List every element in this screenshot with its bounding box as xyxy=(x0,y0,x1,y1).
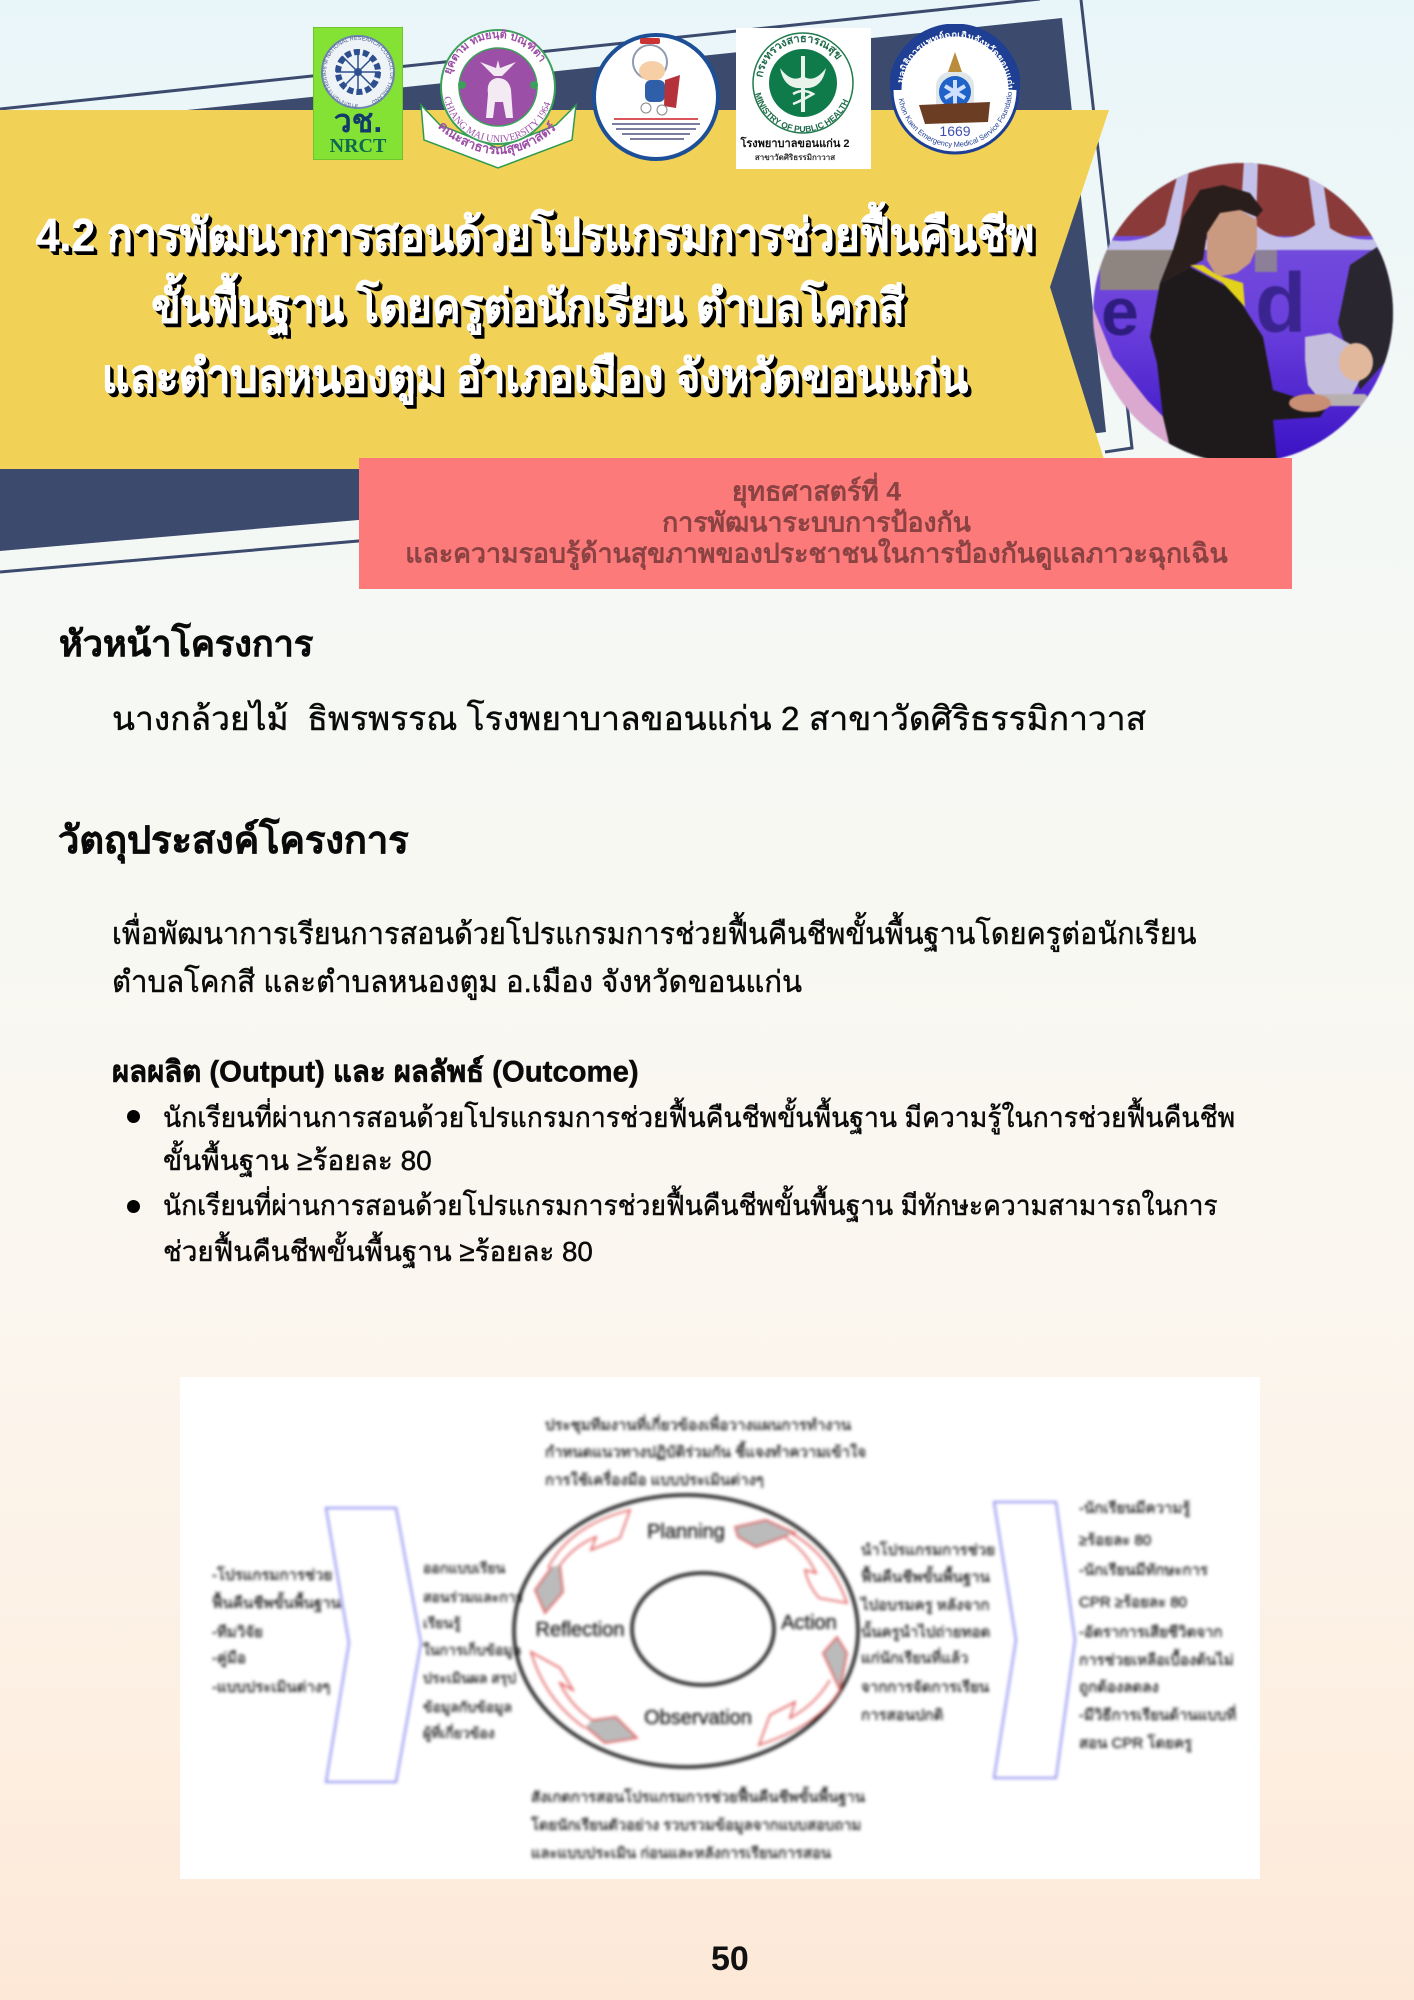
input note: -คู่มือ xyxy=(212,1650,246,1667)
heading: objectives: วัตถุประสงค์โครงการ xyxy=(58,820,409,862)
logo: NRCT: NRCT xyxy=(330,135,387,157)
logo: NRCT: วช. xyxy=(334,103,382,139)
input note: ฟื้นคืนชีพขั้นพื้นฐาน xyxy=(212,1592,341,1612)
action research cycle diagram xyxy=(210,1412,1238,1862)
objective line 1: เพื่อพัฒนาการเรียนการสอนด้วยโปรแกรมการช่วยฟื้นคืนชีพขั้นพื้นฐานโดยครูต่อนักเรียน xyxy=(112,918,1197,951)
logo: Emergency Medical Service Foundation xyxy=(890,24,1020,154)
title line 2: ขั้นพื้นฐาน โดยครูต่อนักเรียน ตำบลโคกสี xyxy=(151,280,905,332)
logo: Chiang Mai University: CHIANG MAI UNIVERSITY 1964 xyxy=(444,96,550,142)
input chevron xyxy=(326,1508,421,1782)
reflection note: ผู้ที่เกี่ยวข้อง xyxy=(423,1724,495,1742)
title line 3: และตำบลหนองตูม อำเภอเมือง จังหวัดขอนแก่น xyxy=(102,350,968,402)
page number: 50 xyxy=(711,1940,749,1978)
strategy heading: ยุทธศาสตร์ที่ 4 xyxy=(732,477,901,507)
input note: -โปรแกรมการช่วย xyxy=(212,1566,332,1584)
output note: การช่วยเหลือเบื้องต้นไม่ xyxy=(1079,1649,1234,1669)
man on right xyxy=(1338,247,1396,390)
hair xyxy=(1160,185,1263,283)
action note: แก่นักเรียนที่แล้ว xyxy=(861,1647,968,1667)
output and outcome heading: ผลผลิต (Output) และ ผลลัพธ์ (Outcome) xyxy=(112,1055,639,1088)
output note: สอน CPR โดยครู xyxy=(1079,1734,1192,1752)
output note: CPR ≥ร้อยละ 80 xyxy=(1079,1594,1187,1611)
top note: การใช้เครื่องมือ แบบประเมินต่างๆ xyxy=(545,1469,764,1489)
outer ring xyxy=(514,1495,858,1767)
logo: mascot xyxy=(592,33,720,161)
reflection note: สอนร่วมและการ xyxy=(423,1589,524,1605)
logo: Chiang Mai University xyxy=(420,29,577,169)
bullet 2 line 2: ช่วยฟื้นคืนชีพขั้นพื้นฐาน ≥ร้อยละ 80 xyxy=(163,1236,593,1267)
reflection note: ในการเก็บข้อมูล xyxy=(423,1641,521,1659)
strategy line 3: และความรอบรู้ด้านสุขภาพของประชาชนในการป้องกันดูแลภาวะฉุกเฉิน xyxy=(405,539,1228,569)
face xyxy=(1207,210,1257,277)
reflection note: เรียนรู้ xyxy=(423,1615,461,1632)
logo: NRCT xyxy=(313,27,403,160)
reflection note: ออกแบบเรียน xyxy=(423,1560,506,1576)
cycle labels: Reflection xyxy=(536,1619,624,1641)
trophy xyxy=(1305,333,1360,400)
output note: ถูกต้องลดลง xyxy=(1079,1679,1159,1696)
thin frame line xyxy=(0,0,1040,109)
project lead name: นางกล้วยไม้ ธิพรพรรณ โรงพยาบาลขอนแก่น 2 สาขาวัดศิริธรรมิกาวาส xyxy=(112,701,1146,738)
logo: Chiang Mai University: ยุคตาม ทมยนฺติ ปณฺฑิตา xyxy=(444,29,545,74)
bullet 1 line 2: ขั้นพื้นฐาน ≥ร้อยละ 80 xyxy=(163,1145,432,1176)
action note: ไปอบรมครู หลังจาก xyxy=(860,1596,990,1614)
diagram panel xyxy=(180,1377,1260,1879)
logo: Ministry of Public Health: กระทรวงสาธารณสุข xyxy=(756,36,842,78)
sign letters e and d: e xyxy=(1101,274,1139,350)
logo: Ministry of Public Health: MINISTRY OF PUBLIC HEALTH xyxy=(755,92,848,132)
output note: ≥ร้อยละ 80 xyxy=(1079,1532,1151,1549)
reflection note: ประเมินผล สรุป xyxy=(423,1670,516,1687)
title xyxy=(36,202,1036,409)
reflection note: ข้อมูลกับข้อมูล xyxy=(423,1699,512,1716)
logo: NRCT: สำนักงานการวิจัยแห่งชาติ NATIONAL RESEARCH COUNCIL OF THAILAND xyxy=(322,36,394,108)
yellow banner xyxy=(0,110,1109,469)
cycle labels: Action xyxy=(781,1612,837,1634)
logo: Ministry of Public Health xyxy=(736,28,871,169)
scarf xyxy=(1190,265,1245,307)
input note xyxy=(212,1566,341,1696)
output chevron xyxy=(994,1502,1075,1778)
strategy box xyxy=(359,458,1292,589)
output note: -นักเรียนมีความรู้ xyxy=(1079,1500,1190,1517)
arrow: reflection to planning xyxy=(535,1510,630,1613)
heading: project lead: หัวหน้าโครงการ xyxy=(59,623,313,664)
bullet 1 line 1: นักเรียนที่ผ่านการสอนด้วยโปรแกรมการช่วยฟื้นคืนชีพขั้นพื้นฐาน มีความรู้ในการช่วยฟื้นคืนชีพ xyxy=(163,1102,1235,1133)
action note: นั้นครูนำไปถ่ายทอด xyxy=(861,1621,990,1641)
objective text xyxy=(112,912,1197,1000)
observation note xyxy=(531,1786,865,1862)
input note: -แบบประเมินต่างๆ xyxy=(212,1679,330,1696)
observation note: และแบบประเมิน ก่อนและหลังการเรียนการสอน xyxy=(531,1845,831,1862)
objective line 2: ตำบลโคกสี และตำบลหนองตูม อ.เมือง จังหวัดขอนแก่น xyxy=(112,966,802,999)
output note xyxy=(1079,1500,1236,1752)
maroon sign letters xyxy=(1114,162,1372,237)
action note: จากการจัดการเรียน xyxy=(861,1679,989,1696)
logo: Ministry of Public Health: สาขาวัดศิริธรรมิกาวาส xyxy=(755,153,835,162)
reflection note xyxy=(423,1560,524,1742)
output note: -นักเรียนมีทักษะการ xyxy=(1079,1562,1208,1579)
top note xyxy=(545,1414,866,1489)
top note: กำหนดแนวทางปฏิบัติร่วมกัน ชี้แจงทำความเข้าใจ xyxy=(545,1441,866,1461)
output bullets xyxy=(127,1097,1235,1268)
logo: Emergency Medical Service Foundation: มูลนิธิการแพทย์ฉุกเฉินจังหวัดขอนแก่น xyxy=(898,30,1014,90)
bullet 2 xyxy=(127,1200,140,1213)
observation note: โดยนักเรียนตัวอย่าง รวบรวมข้อมูลจากแบบสอบถาม xyxy=(531,1816,861,1834)
action note xyxy=(860,1541,995,1724)
output note: -มีวิธีการเรียนด้านแบบที่ xyxy=(1079,1704,1236,1724)
logo: Ministry of Public Health: โรงพยาบาลขอนแก่น 2 xyxy=(739,136,850,150)
header background shapes xyxy=(0,0,1134,574)
arrow: observation to reflection xyxy=(531,1652,637,1743)
action note: นำโปรแกรมการช่วย xyxy=(861,1541,995,1559)
cycle labels xyxy=(536,1521,837,1729)
logo: Chiang Mai University: คณะสาธารณสุขศาสตร์ xyxy=(438,120,556,156)
bullet 2 line 1: นักเรียนที่ผ่านการสอนด้วยโปรแกรมการช่วยฟื้นคืนชีพขั้นพื้นฐาน มีทักษะความสามารถในการ xyxy=(163,1190,1218,1221)
observation note: สังเกตการสอนโปรแกรมการช่วยฟื้นคืนชีพขั้นพื้นฐาน xyxy=(531,1786,865,1806)
title line 1: 4.2 การพัฒนาการสอนด้วยโปรแกรมการช่วยฟื้นคืนชีพ xyxy=(36,209,1034,261)
hands xyxy=(1339,343,1373,381)
action note: ฟื้นคืนชีพขั้นพื้นฐาน xyxy=(861,1566,990,1586)
input note: -ทีมวิจัย xyxy=(212,1624,263,1641)
pink crescent xyxy=(1092,308,1170,444)
arrow: planning to action xyxy=(735,1520,847,1603)
cycle labels: Observation xyxy=(644,1707,752,1729)
output note: -อัตราการเสียชีวิตจาก xyxy=(1079,1624,1222,1641)
portrait photo xyxy=(1092,162,1394,458)
top note: ประชุมทีมงานที่เกี่ยวข้องเพื่อวางแผนการทำงาน xyxy=(545,1414,851,1435)
inner ring xyxy=(632,1573,774,1685)
navy slanted band behind banner xyxy=(187,18,1106,445)
navy lower left band xyxy=(0,460,370,551)
bullet 1 xyxy=(127,1110,140,1123)
woman jacket xyxy=(1150,267,1327,460)
strategy line 2: การพัฒนาระบบการป้องกัน xyxy=(662,508,971,538)
logo: Emergency Medical Service Foundation: 1669 xyxy=(939,123,971,139)
cycle labels: Planning xyxy=(647,1521,725,1543)
portrait photo: d xyxy=(1255,256,1306,350)
gray patch xyxy=(1099,249,1174,291)
action note: การสอนปกติ xyxy=(861,1707,943,1724)
arrow: action to observation xyxy=(759,1637,847,1745)
